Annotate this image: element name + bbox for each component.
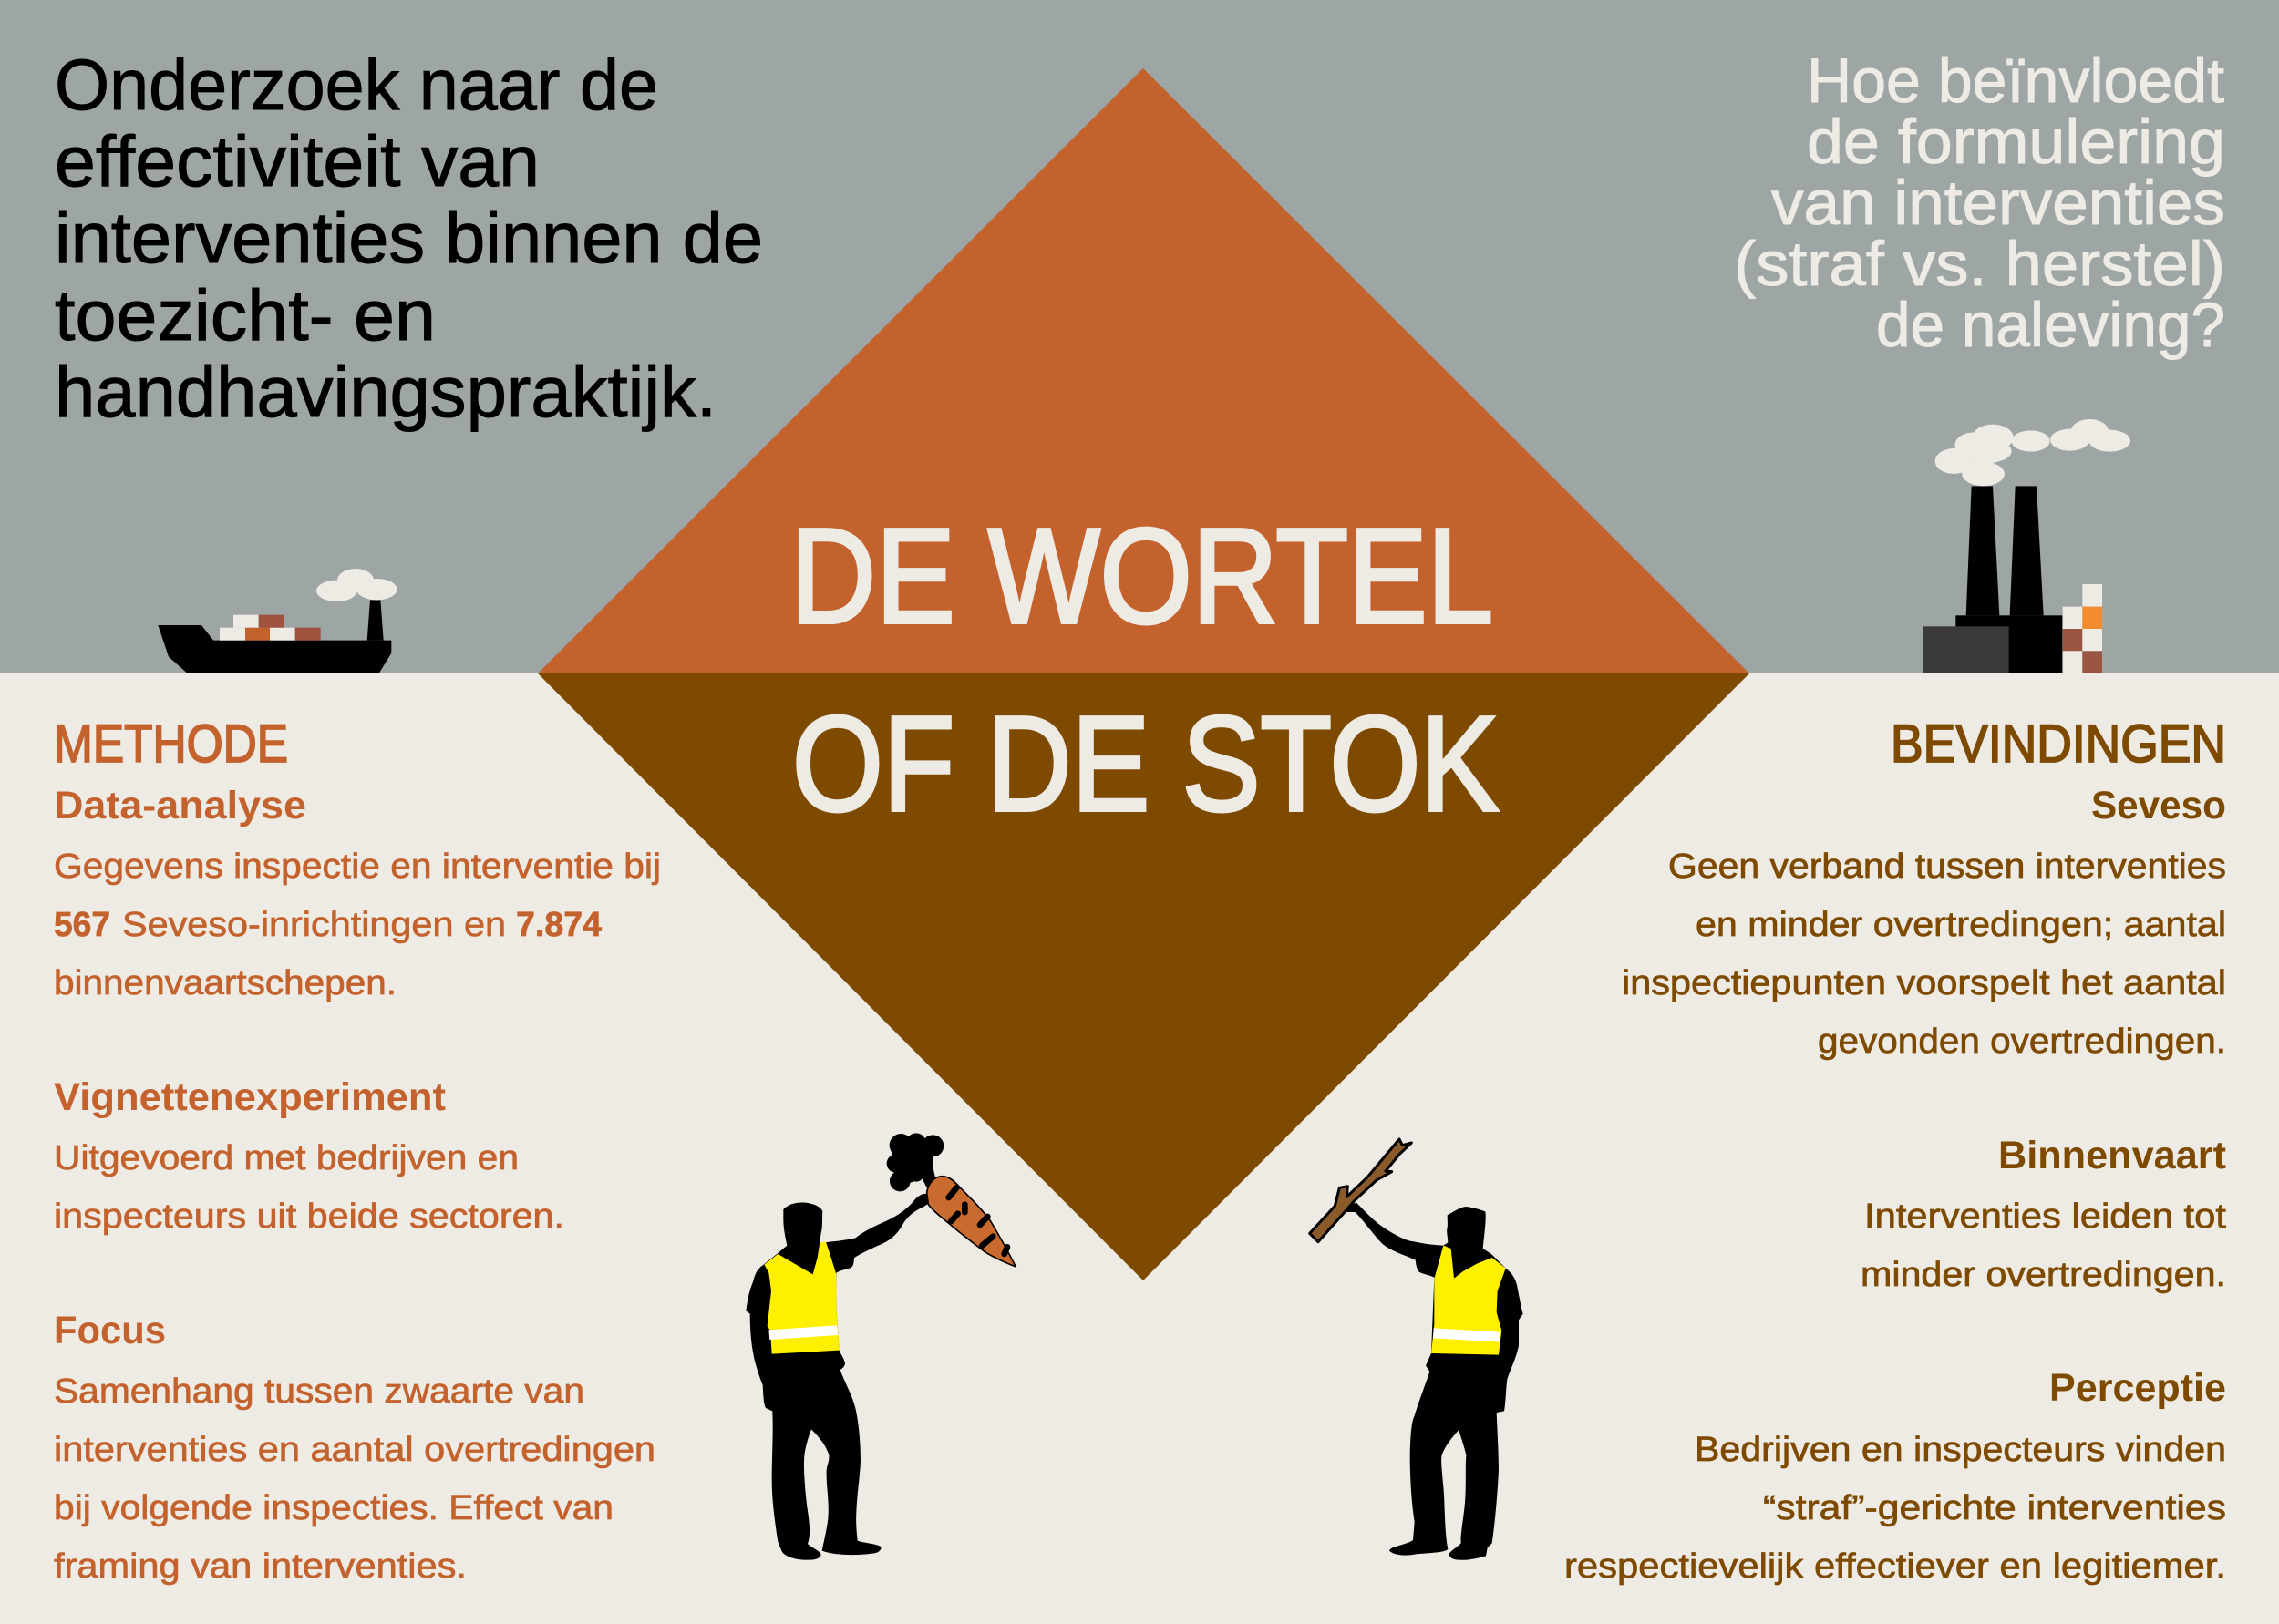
- heading: research question, top right: (straf vs. herstel): [1734, 229, 2225, 299]
- heading: research subject, top left: effectiviteit van: [55, 120, 540, 201]
- heading: research question, top right: de formulering: [1807, 107, 2225, 177]
- block: seveso: inspectiepunten voorspelt het aantal: [1622, 964, 2226, 1002]
- silhouette: man: [746, 1194, 933, 1560]
- diamond: orange upper half: [538, 68, 1749, 673]
- block: data-analyse: Seveso-inrichtingen en: [122, 906, 506, 944]
- main title: OF DE STOK: [792, 689, 1499, 839]
- block: data-analyse: Gegevens inspectie en interventie bij: [54, 848, 661, 886]
- main title: DE WORTEL: [790, 501, 1493, 652]
- block: perceptie: respectievelijk effectiever en legitiemer.: [1564, 1547, 2226, 1586]
- block: focus: [54, 1309, 655, 1586]
- silhouette: man: [1345, 1203, 1523, 1560]
- panel: bevindingen: [1564, 714, 2226, 1586]
- block: binnenvaart: Binnenvaart: [1998, 1134, 2226, 1177]
- vest: [1431, 1246, 1506, 1355]
- block: seveso: en minder overtredingen; aantal: [1696, 906, 2226, 944]
- vest reflective band: [1433, 1328, 1500, 1342]
- panel: methode: [54, 714, 661, 1586]
- heading: bevindingen: BEVINDINGEN: [1891, 714, 2226, 774]
- block: seveso: gevonden overtredingen.: [1818, 1023, 2226, 1061]
- heading: research subject, top left: [55, 44, 763, 432]
- block: perceptie: [1564, 1366, 2226, 1586]
- diamond: brown lower half: [538, 673, 1749, 1280]
- block: perceptie: Perceptie: [2049, 1366, 2226, 1410]
- block: focus: bij volgende inspecties. Effect van: [54, 1489, 614, 1527]
- main title: [790, 501, 1499, 839]
- figure: inspector with stick: [1310, 1139, 1523, 1560]
- block: data-analyse: binnenvaartschepen.: [54, 964, 397, 1002]
- block: vignettenexperiment: [54, 1075, 564, 1236]
- icon: ship: [158, 569, 397, 673]
- block: data-analyse: [54, 784, 661, 1002]
- block: data-analyse: 7.874: [516, 906, 602, 944]
- icon: stick: [1310, 1139, 1411, 1242]
- block: perceptie: Bedrijven en inspecteurs vinden: [1695, 1431, 2226, 1469]
- block: data-analyse: 567: [54, 906, 110, 944]
- icon: factory: [1923, 419, 2130, 673]
- block: vignettenexperiment: inspecteurs uit beide sectoren.: [54, 1197, 564, 1236]
- block: focus: interventies en aantal overtredingen: [54, 1431, 655, 1469]
- heading: research subject, top left: handhavingspraktijk.: [55, 351, 717, 432]
- icon: carrot leaves: [887, 1133, 944, 1191]
- block: seveso: Geen verband tussen interventies: [1668, 848, 2226, 886]
- vest: [764, 1242, 840, 1354]
- block: binnenvaart: minder overtredingen.: [1861, 1256, 2226, 1294]
- background: grey sky: [0, 0, 2279, 673]
- heading: research question, top right: van interventies: [1771, 168, 2225, 238]
- heading: research question, top right: de naleving?: [1876, 290, 2225, 360]
- heading: research question, top right: [1734, 46, 2225, 360]
- heading: research subject, top left: interventies binnen de: [55, 197, 763, 278]
- block: perceptie: “straf”-gerichte interventies: [1763, 1489, 2226, 1527]
- block: vignettenexperiment: Vignettenexperiment: [54, 1075, 446, 1119]
- block: binnenvaart: [1861, 1134, 2226, 1294]
- heading: research question, top right: Hoe beïnvloedt: [1807, 46, 2224, 116]
- background: cream ground: [0, 673, 2279, 1624]
- vest reflective band: [768, 1325, 838, 1340]
- block: vignettenexperiment: Uitgevoerd met bedrijven en: [54, 1139, 519, 1177]
- block: binnenvaart: Interventies leiden tot: [1864, 1197, 2226, 1236]
- block: focus: framing van interventies.: [54, 1547, 467, 1586]
- block: seveso: Seveso: [2091, 784, 2226, 827]
- figure: inspector with carrot: [746, 1133, 1016, 1560]
- heading: methode: METHODE: [54, 714, 288, 774]
- heading: research subject, top left: toezicht- en: [55, 274, 436, 355]
- block: data-analyse: Data-analyse: [54, 784, 306, 827]
- icon: carrot: [927, 1177, 1016, 1267]
- block: seveso: [1622, 784, 2226, 1061]
- block: focus: Focus: [54, 1309, 166, 1352]
- block: focus: Samenhang tussen zwaarte van: [54, 1372, 584, 1411]
- heading: research subject, top left: Onderzoek naar de: [55, 44, 658, 125]
